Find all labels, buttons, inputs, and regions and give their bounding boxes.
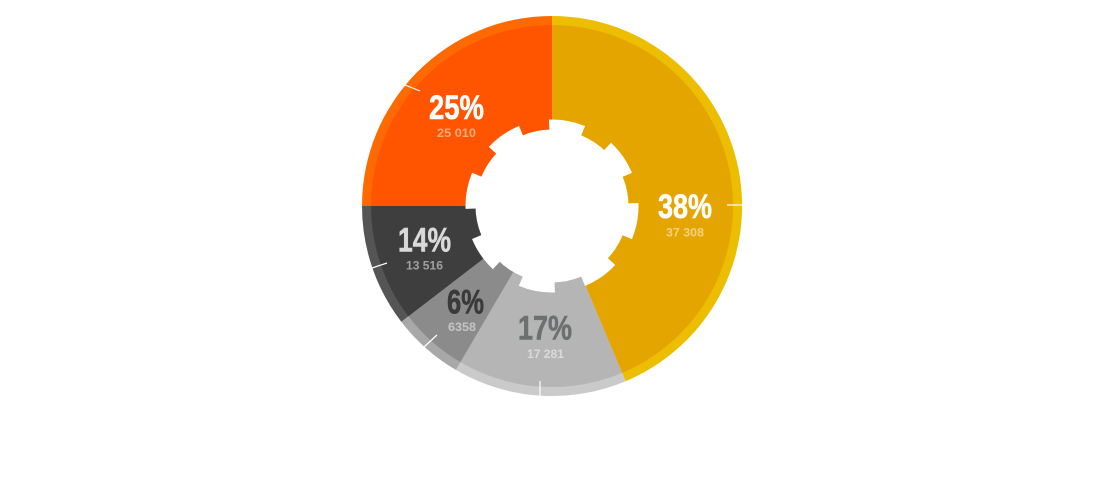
segment: 25% orange [362,16,552,206]
tick marks [372,85,742,396]
label: 14%: 14% [398,222,451,260]
label: 17% [518,310,572,361]
label: 17%: 17% [518,310,572,348]
label: 6%: 6358 [448,322,477,334]
label: 6%: 6% [447,284,484,322]
segment: 14% dark gray [362,206,552,322]
label: 14% [398,222,451,272]
label: 38%: 37 308 [666,228,705,240]
label: 17%: 17 281 [527,349,565,361]
segment: 6% mid gray [401,206,552,370]
segment: 17% light gray [456,206,626,396]
label: 25%: 25 010 [437,128,476,140]
label: 38%: 38% [658,188,712,226]
label: 25%: 25% [429,89,484,127]
segment: 38% amber [552,16,742,381]
center hub: white gear [468,122,636,290]
label: 25% [429,89,484,140]
label: 6% [447,284,484,334]
label: 14%: 13 516 [406,260,443,272]
label: 38% [658,188,712,240]
